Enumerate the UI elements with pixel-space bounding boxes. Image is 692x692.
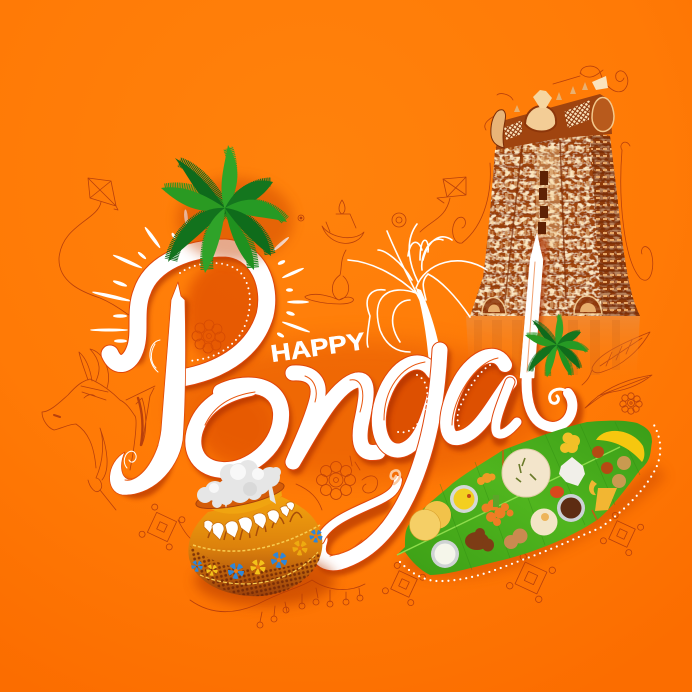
doodle: flower centre bbox=[316, 456, 378, 500]
temple: faded base bbox=[466, 316, 640, 385]
doodle: small flowers bbox=[298, 213, 406, 227]
doodle: kolam left bbox=[138, 503, 186, 551]
letter n bbox=[293, 373, 378, 462]
small coconut palm by the temple bbox=[525, 314, 588, 378]
doodle: kolam bottom right bbox=[505, 552, 557, 604]
dots inside P bowl bbox=[180, 263, 250, 361]
clay pot with overflowing pongal bbox=[188, 460, 335, 606]
pot shadow bbox=[195, 554, 335, 606]
heading: HAPPY: HAPPY bbox=[269, 328, 367, 368]
letter a bbox=[447, 356, 517, 438]
fried sweet bbox=[465, 528, 494, 552]
leaf shadow bbox=[405, 470, 660, 569]
doodle: oil lamp bbox=[305, 200, 364, 304]
sweet balls bbox=[592, 446, 631, 488]
temple: lower arches bbox=[482, 296, 602, 314]
fried crescents bbox=[589, 480, 617, 511]
doodle: kolam bottom centre bbox=[381, 561, 427, 607]
coconut dish bbox=[559, 457, 585, 486]
banana chips bbox=[560, 432, 580, 453]
leaf white dots bbox=[400, 425, 660, 581]
doodle: left kite bbox=[59, 178, 130, 316]
doodle: swirls around temple bbox=[553, 66, 653, 280]
doodle: flower right bbox=[620, 393, 642, 414]
vegetable stir fry bbox=[482, 495, 514, 526]
palm shadow bbox=[177, 178, 293, 262]
doodle: wheat ears bbox=[582, 332, 652, 408]
temple: roof bbox=[491, 76, 614, 150]
sugarcane in white line art bbox=[348, 224, 487, 378]
lettering: Pongal bbox=[110, 233, 575, 568]
doodle: garland under pot bbox=[178, 484, 365, 628]
letter g bbox=[318, 350, 440, 563]
lettering shadow bbox=[123, 245, 575, 568]
letter o bbox=[193, 385, 281, 470]
banana bbox=[596, 431, 644, 462]
temple gopuram bbox=[466, 76, 640, 385]
sun rays around P bbox=[90, 209, 311, 343]
poori bbox=[410, 501, 451, 540]
doodle: flower centre-left bbox=[192, 320, 225, 353]
doodles: line art behind the lettering bbox=[42, 66, 653, 628]
pickle bbox=[550, 486, 564, 498]
top vegetables bbox=[477, 473, 496, 485]
coconut palm above P bbox=[161, 145, 287, 273]
doodle: right kite bbox=[420, 94, 513, 243]
large soft shade behind lettering bbox=[170, 260, 550, 480]
rice mound bbox=[502, 449, 550, 497]
banana leaf meal bbox=[397, 421, 660, 581]
cookies bbox=[504, 528, 528, 549]
pot body bbox=[188, 482, 322, 596]
bowl: yellow curry bbox=[450, 485, 478, 513]
bowl: curd bbox=[431, 540, 459, 568]
letter l bbox=[520, 233, 572, 427]
bowl: brown curry bbox=[557, 494, 585, 522]
doodle: bull bbox=[42, 349, 155, 510]
pongal foam bbox=[197, 460, 281, 508]
flowers on pot bbox=[194, 532, 320, 576]
banana leaf bbox=[397, 421, 652, 575]
letter P bbox=[110, 248, 267, 495]
dots inside g bbox=[398, 375, 427, 432]
pot rim bbox=[194, 476, 286, 514]
temple: carved tower body bbox=[470, 128, 640, 316]
idli bbox=[530, 508, 558, 536]
doodle: kolam right bbox=[599, 511, 645, 557]
pot garland of drops bbox=[204, 502, 294, 540]
dots inside a bbox=[458, 365, 490, 426]
